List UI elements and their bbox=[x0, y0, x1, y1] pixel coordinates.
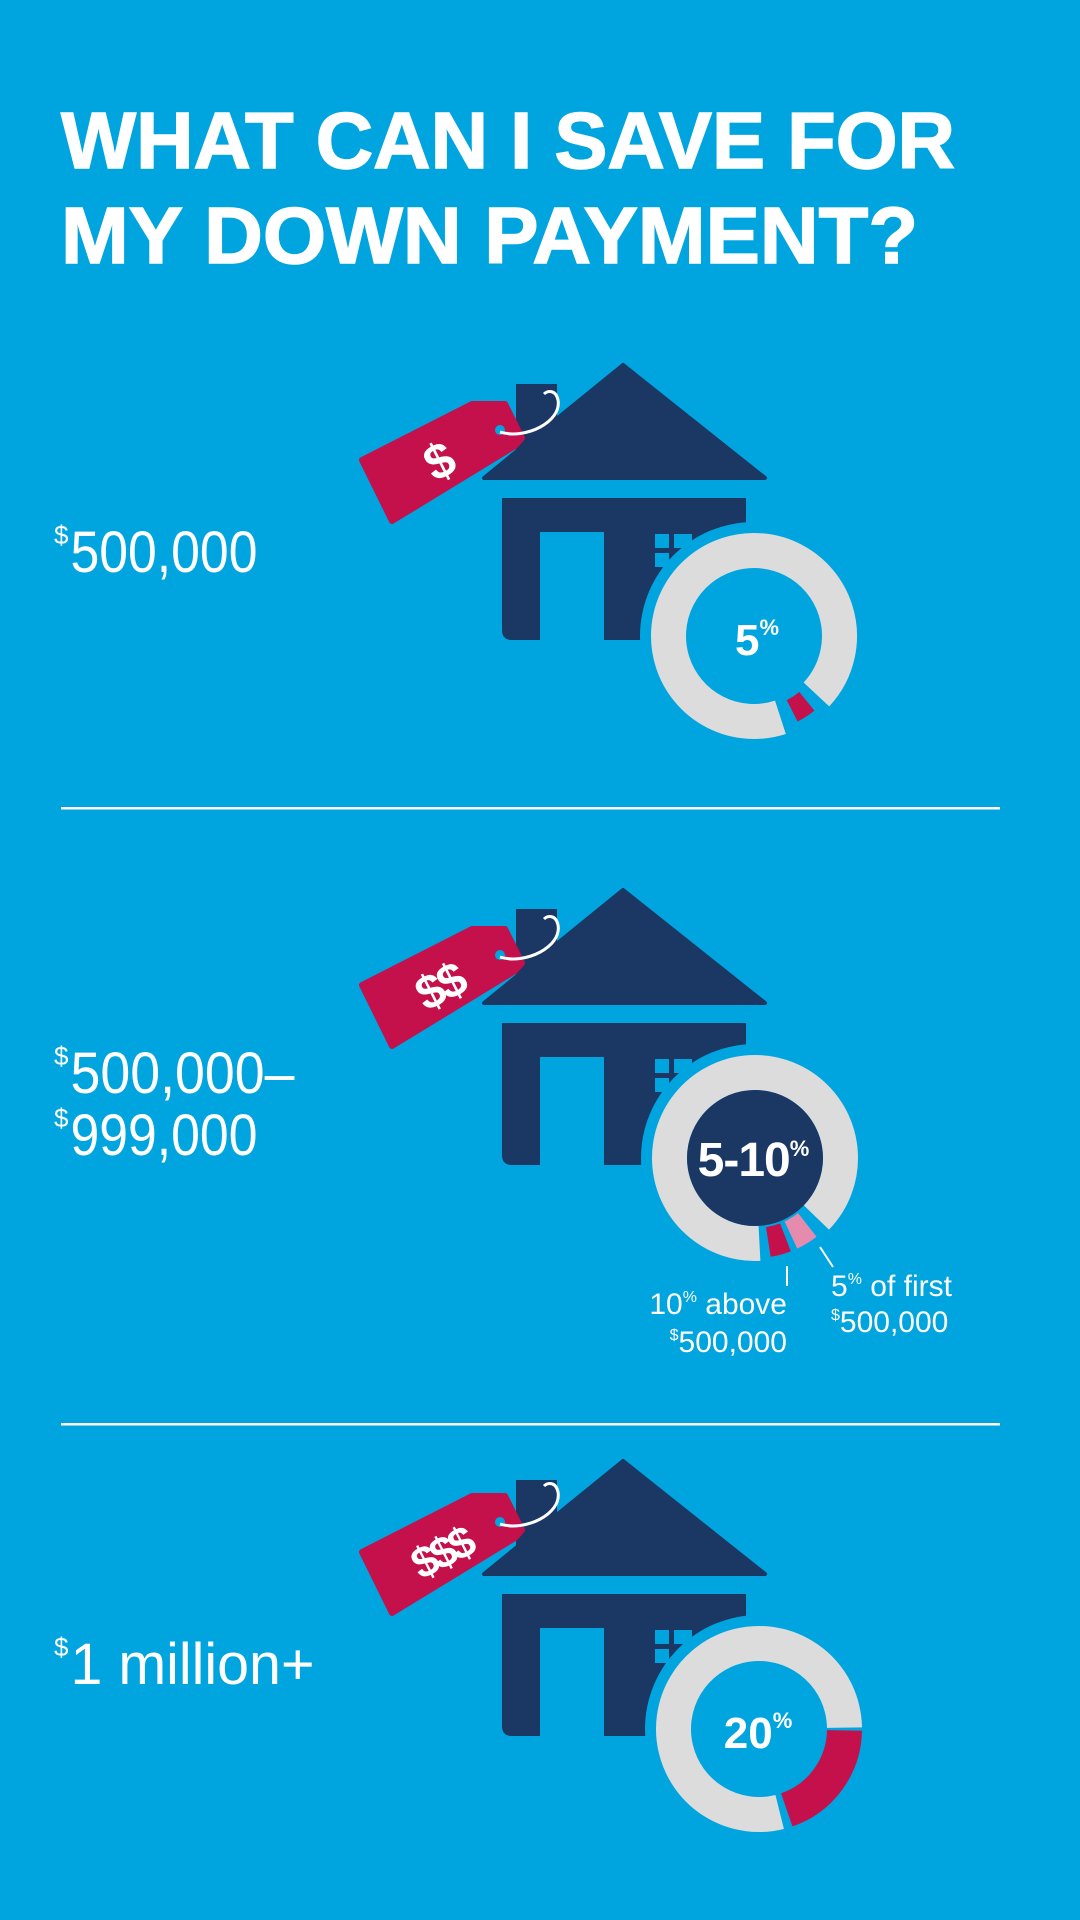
title: WHAT CAN I SAVE FOR bbox=[61, 96, 955, 185]
annotation: 10% above: 500,000 bbox=[679, 1326, 787, 1359]
label: 500,000: $ bbox=[54, 520, 69, 550]
label: 500,000-999,000: 500,000– bbox=[70, 1041, 295, 1106]
price tag bbox=[362, 392, 558, 521]
annotation: 5% of first: of first bbox=[862, 1270, 953, 1303]
donut: 5-10%: 5-10 bbox=[698, 1134, 790, 1187]
donut: 20% bbox=[645, 1615, 873, 1843]
annotation: 5% of first bbox=[820, 1247, 953, 1339]
annotation: 10% above bbox=[649, 1266, 788, 1359]
donut: 5-10% bbox=[636, 1039, 874, 1277]
label: 500,000-999,000: $ bbox=[54, 1041, 69, 1071]
annotation: 5% of first: $ bbox=[831, 1307, 840, 1324]
label: 500,000-999,000 bbox=[54, 1041, 295, 1168]
donut: 5%: % bbox=[759, 615, 779, 640]
donut: 5-10%: % bbox=[790, 1136, 809, 1161]
donut: 20%: 20 bbox=[724, 1709, 773, 1758]
house icon bbox=[484, 365, 765, 640]
label: 1 million+: $ bbox=[54, 1632, 69, 1662]
title bbox=[61, 96, 955, 280]
price tag bbox=[362, 917, 558, 1046]
label: 500,000-999,000: $ bbox=[54, 1103, 69, 1133]
donut: 5% bbox=[636, 518, 872, 754]
price tag bbox=[362, 1484, 558, 1613]
annotation: 10% above: above bbox=[697, 1288, 787, 1321]
price tag: $ bbox=[414, 430, 465, 492]
price tag: $$ bbox=[407, 952, 476, 1022]
title: MY DOWN PAYMENT? bbox=[61, 191, 918, 280]
section 1 house bbox=[362, 365, 872, 754]
donut: 20%: % bbox=[773, 1708, 792, 1733]
annotation: 10% above: % bbox=[683, 1289, 697, 1306]
label: 1 million+: 1 million+ bbox=[70, 1632, 314, 1697]
house icon bbox=[484, 1461, 765, 1736]
label: 500,000-999,000: 999,000 bbox=[70, 1103, 257, 1168]
annotation: 5% of first: % bbox=[848, 1271, 862, 1288]
donut: 5%: 5 bbox=[735, 616, 759, 665]
annotation: 5% of first: 5 bbox=[831, 1270, 848, 1303]
label: 500,000: 500,000 bbox=[70, 520, 257, 585]
annotation: 10% above: 10 bbox=[649, 1288, 683, 1321]
section 2 house bbox=[362, 890, 874, 1277]
section 3 house bbox=[362, 1461, 873, 1843]
price tag: $$$ bbox=[403, 1516, 483, 1589]
annotation: 5% of first: 500,000 bbox=[840, 1306, 948, 1339]
annotation: 10% above: $ bbox=[670, 1327, 679, 1344]
house icon bbox=[484, 890, 765, 1165]
